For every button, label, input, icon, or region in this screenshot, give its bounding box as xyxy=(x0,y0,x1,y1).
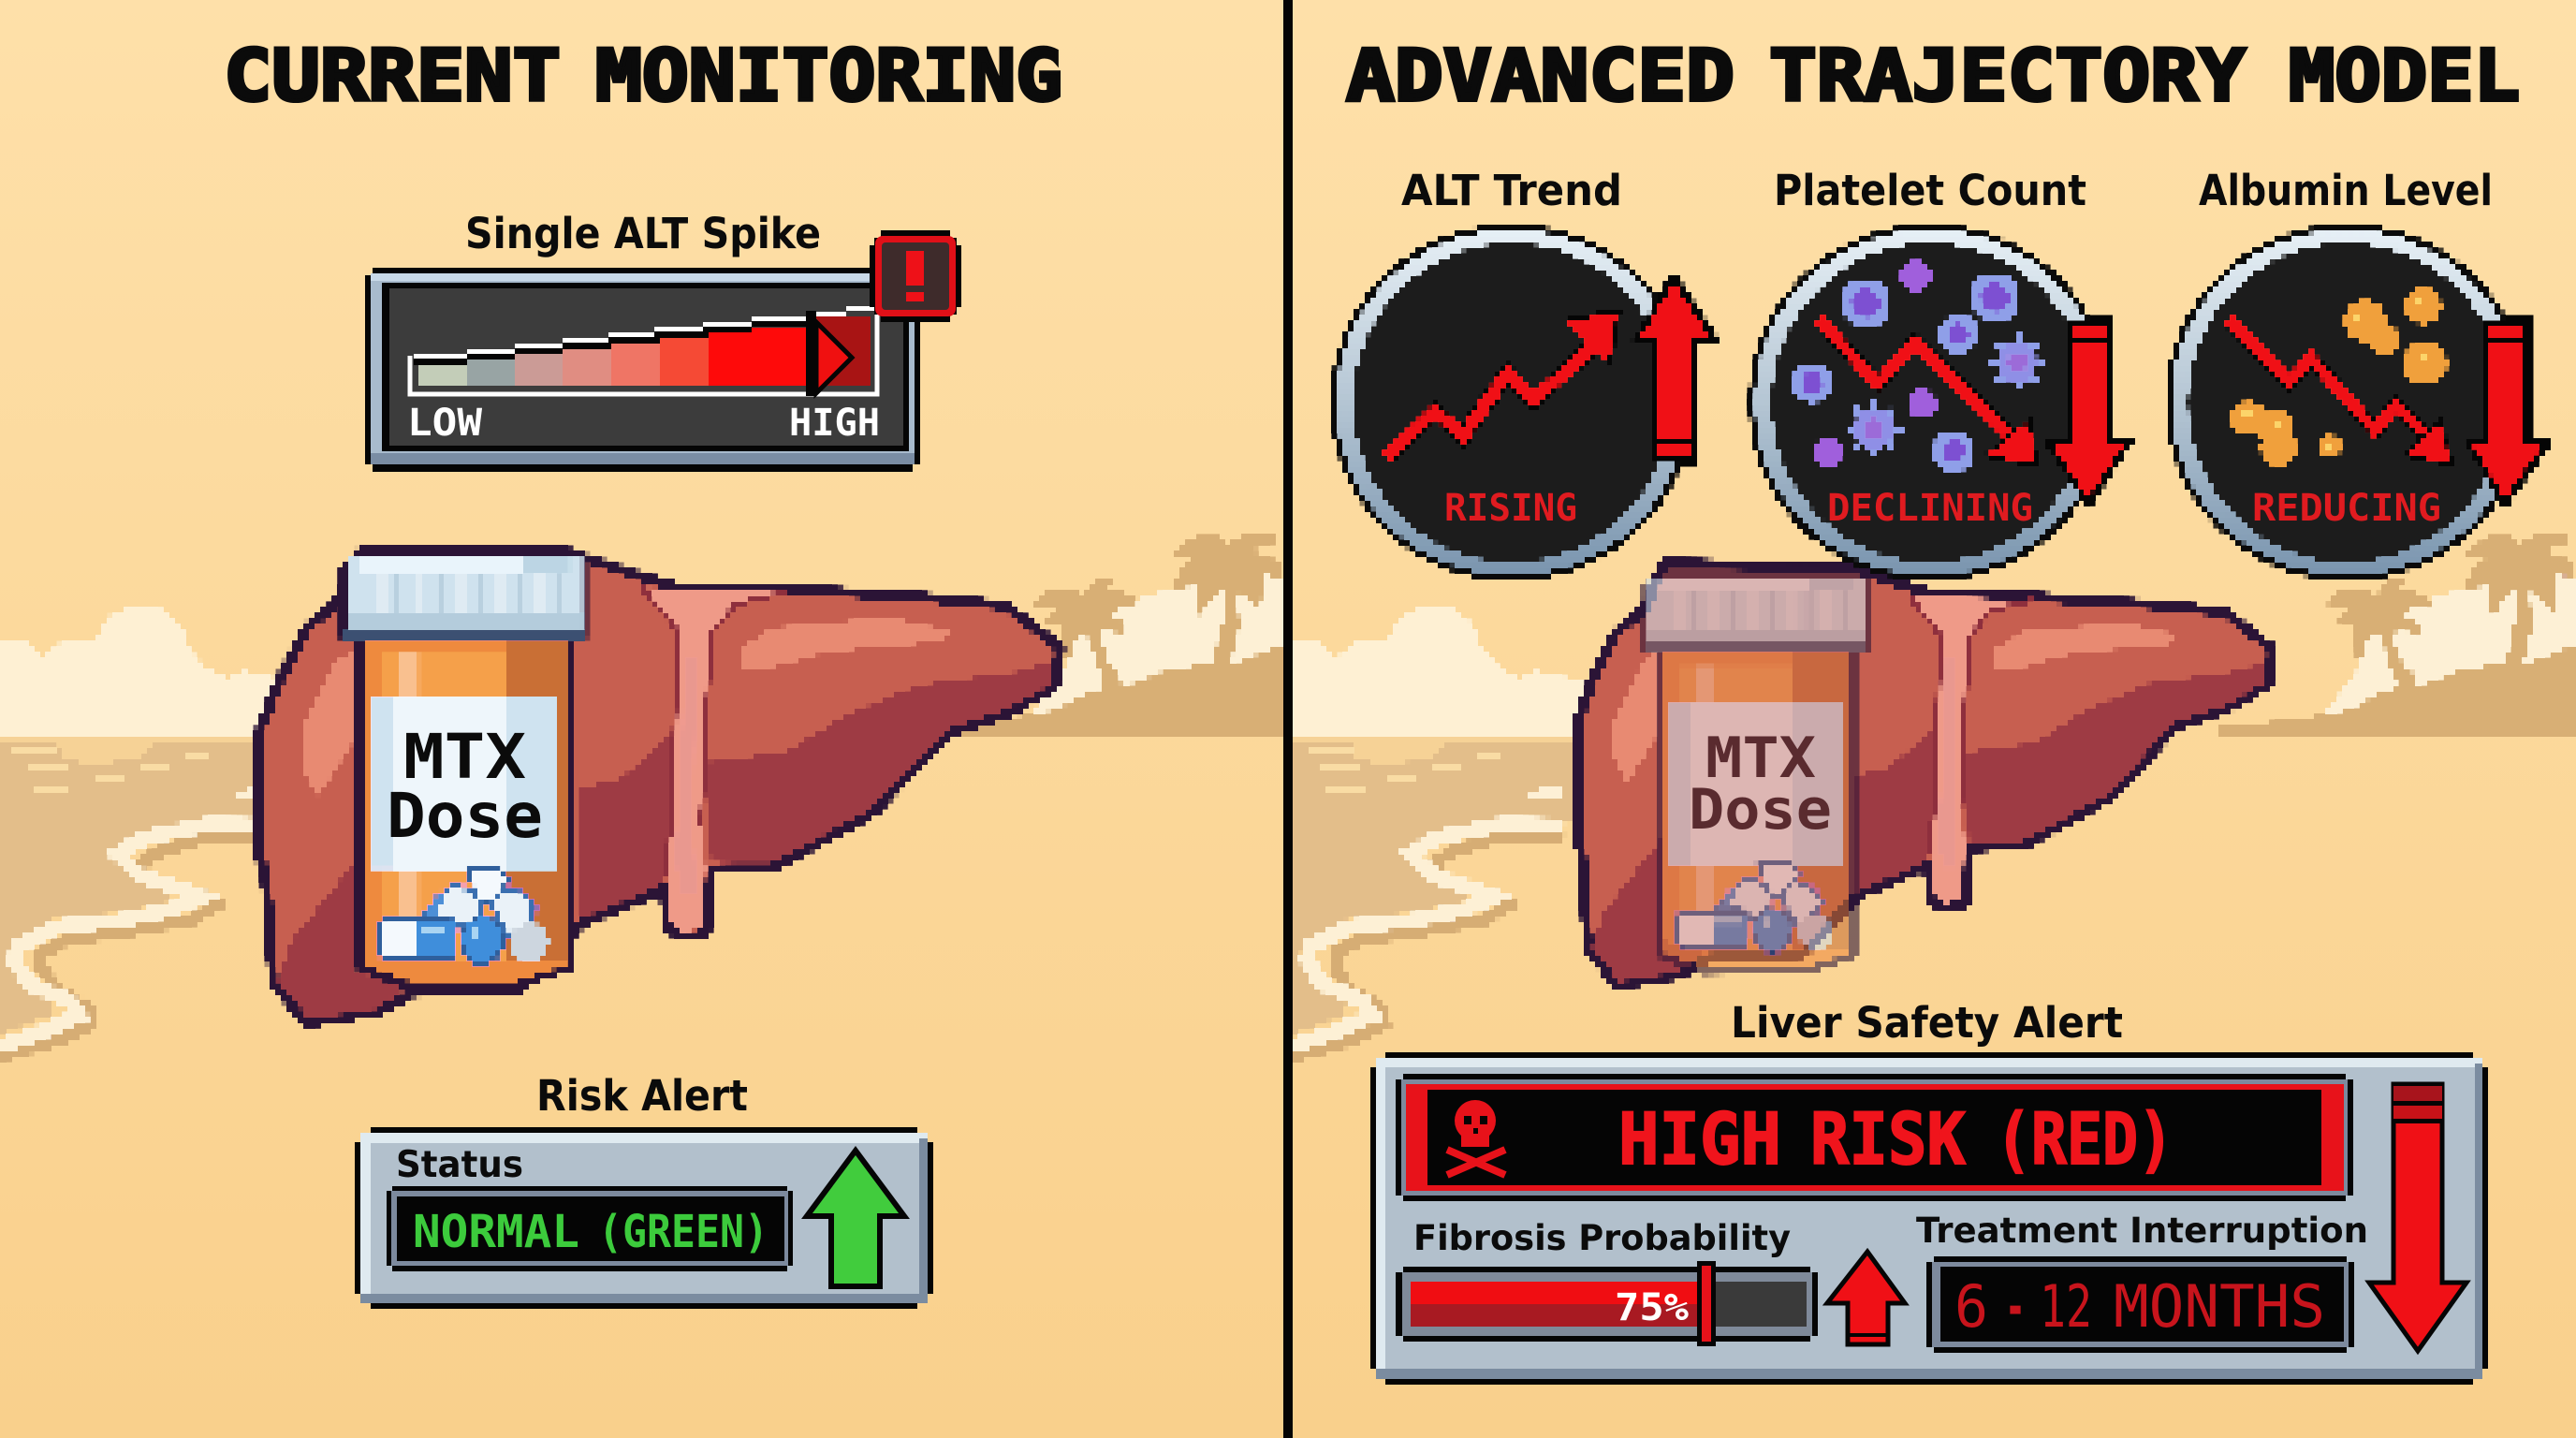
title: current monitoring: CURRENT xyxy=(224,34,561,117)
icon: red up arrow xyxy=(1635,277,1716,461)
months screen: MONTHS xyxy=(2114,1272,2325,1341)
high risk screen xyxy=(1396,1074,2353,1201)
label: reducing: REDUCING xyxy=(2252,487,2441,530)
panel: albumin level gauge xyxy=(2166,225,2549,580)
icon: green up arrow xyxy=(807,1151,904,1286)
icons: albumin particles xyxy=(2232,288,2447,465)
icons: platelet cells xyxy=(1793,261,2045,472)
status screen xyxy=(387,1186,793,1271)
illustration: faded liver with MTX bottle xyxy=(1577,564,2272,984)
icon: pill bottle xyxy=(340,544,587,989)
chart: declining line xyxy=(1818,318,2037,466)
months screen: 12 xyxy=(2040,1272,2092,1341)
label: high: HIGH xyxy=(789,402,880,445)
high risk screen: (RED) xyxy=(1996,1097,2174,1181)
panel: risk alert status xyxy=(355,1127,933,1309)
panel: liver safety alert xyxy=(1370,1052,2488,1385)
title: advanced trajectory model: TRAJECTORY xyxy=(1769,34,2246,117)
label: status: Status xyxy=(396,1144,523,1186)
label: fibrosis probability: Fibrosis Probability xyxy=(1413,1218,1791,1258)
status screen: NORMAL xyxy=(413,1206,579,1258)
label: declining: DECLINING xyxy=(1827,487,2033,530)
label: MTX dose: Dose xyxy=(387,780,543,852)
label: treatment interruption: Treatment Interruption xyxy=(1916,1211,2368,1251)
heading: single ALT spike: Single ALT Spike xyxy=(465,209,821,258)
heading: ALT trend: ALT Trend xyxy=(1401,166,1622,215)
chart: rising line xyxy=(1388,307,1622,457)
chart: fibrosis probability bar xyxy=(1396,1261,1818,1346)
label: rising: RISING xyxy=(1444,487,1577,530)
title: advanced trajectory model: ADVANCED xyxy=(1346,34,1734,117)
label: MTX dose faded: MTX xyxy=(1705,726,1816,791)
heading: platelet count: Platelet Count xyxy=(1774,166,2086,215)
meter gradient bar xyxy=(410,306,880,396)
title: current monitoring xyxy=(224,34,1062,117)
heading: albumin level: Albumin Level xyxy=(2199,166,2493,215)
title: advanced trajectory model xyxy=(1346,34,2520,117)
icon: small red up arrow xyxy=(1827,1252,1905,1344)
icon: translucent pill bottle xyxy=(1641,565,1869,975)
months screen: - xyxy=(2005,1272,2026,1341)
icon: red down arrow xyxy=(2466,321,2549,504)
status screen: (GREEN) xyxy=(598,1206,768,1258)
months screen xyxy=(1926,1256,2354,1353)
panel: current monitoring beach scene xyxy=(0,532,1284,1056)
icon: skull and crossbones xyxy=(1447,1100,1505,1175)
icon: liver xyxy=(260,551,1060,1022)
high risk screen: HIGH xyxy=(1618,1097,1781,1181)
label: MTX dose faded xyxy=(1689,726,1832,843)
panel: platelet count gauge xyxy=(1749,225,2130,580)
label: MTX dose faded: Dose xyxy=(1689,777,1832,843)
chart: fibrosis probability bar: 75% xyxy=(1615,1286,1689,1329)
icon: exclamation alert xyxy=(870,230,961,322)
high risk screen: RISK xyxy=(1810,1097,1966,1181)
heading: risk alert: Risk Alert xyxy=(536,1071,748,1121)
title: advanced trajectory model: MODEL xyxy=(2289,34,2520,117)
panel: advanced model beach scene xyxy=(1293,532,2576,1056)
chart: reducing line xyxy=(2229,320,2453,465)
label: low: LOW xyxy=(407,402,483,445)
label: MTX dose xyxy=(387,721,543,852)
panel: ALT spike meter xyxy=(365,268,920,472)
icon: liver xyxy=(1577,564,2272,984)
divider between panels xyxy=(1283,0,1293,1438)
label: MTX dose: MTX xyxy=(403,721,526,793)
panel: ALT trend gauge xyxy=(1331,225,1716,580)
icon: large red down arrow xyxy=(2369,1084,2466,1351)
icon: red down arrow xyxy=(2046,321,2130,504)
heading: liver safety alert: Liver Safety Alert xyxy=(1731,998,2123,1048)
title: current monitoring: MONITORING xyxy=(595,34,1062,117)
illustration: liver with MTX bottle xyxy=(260,544,1060,1022)
months screen: 6 xyxy=(1954,1272,1988,1341)
